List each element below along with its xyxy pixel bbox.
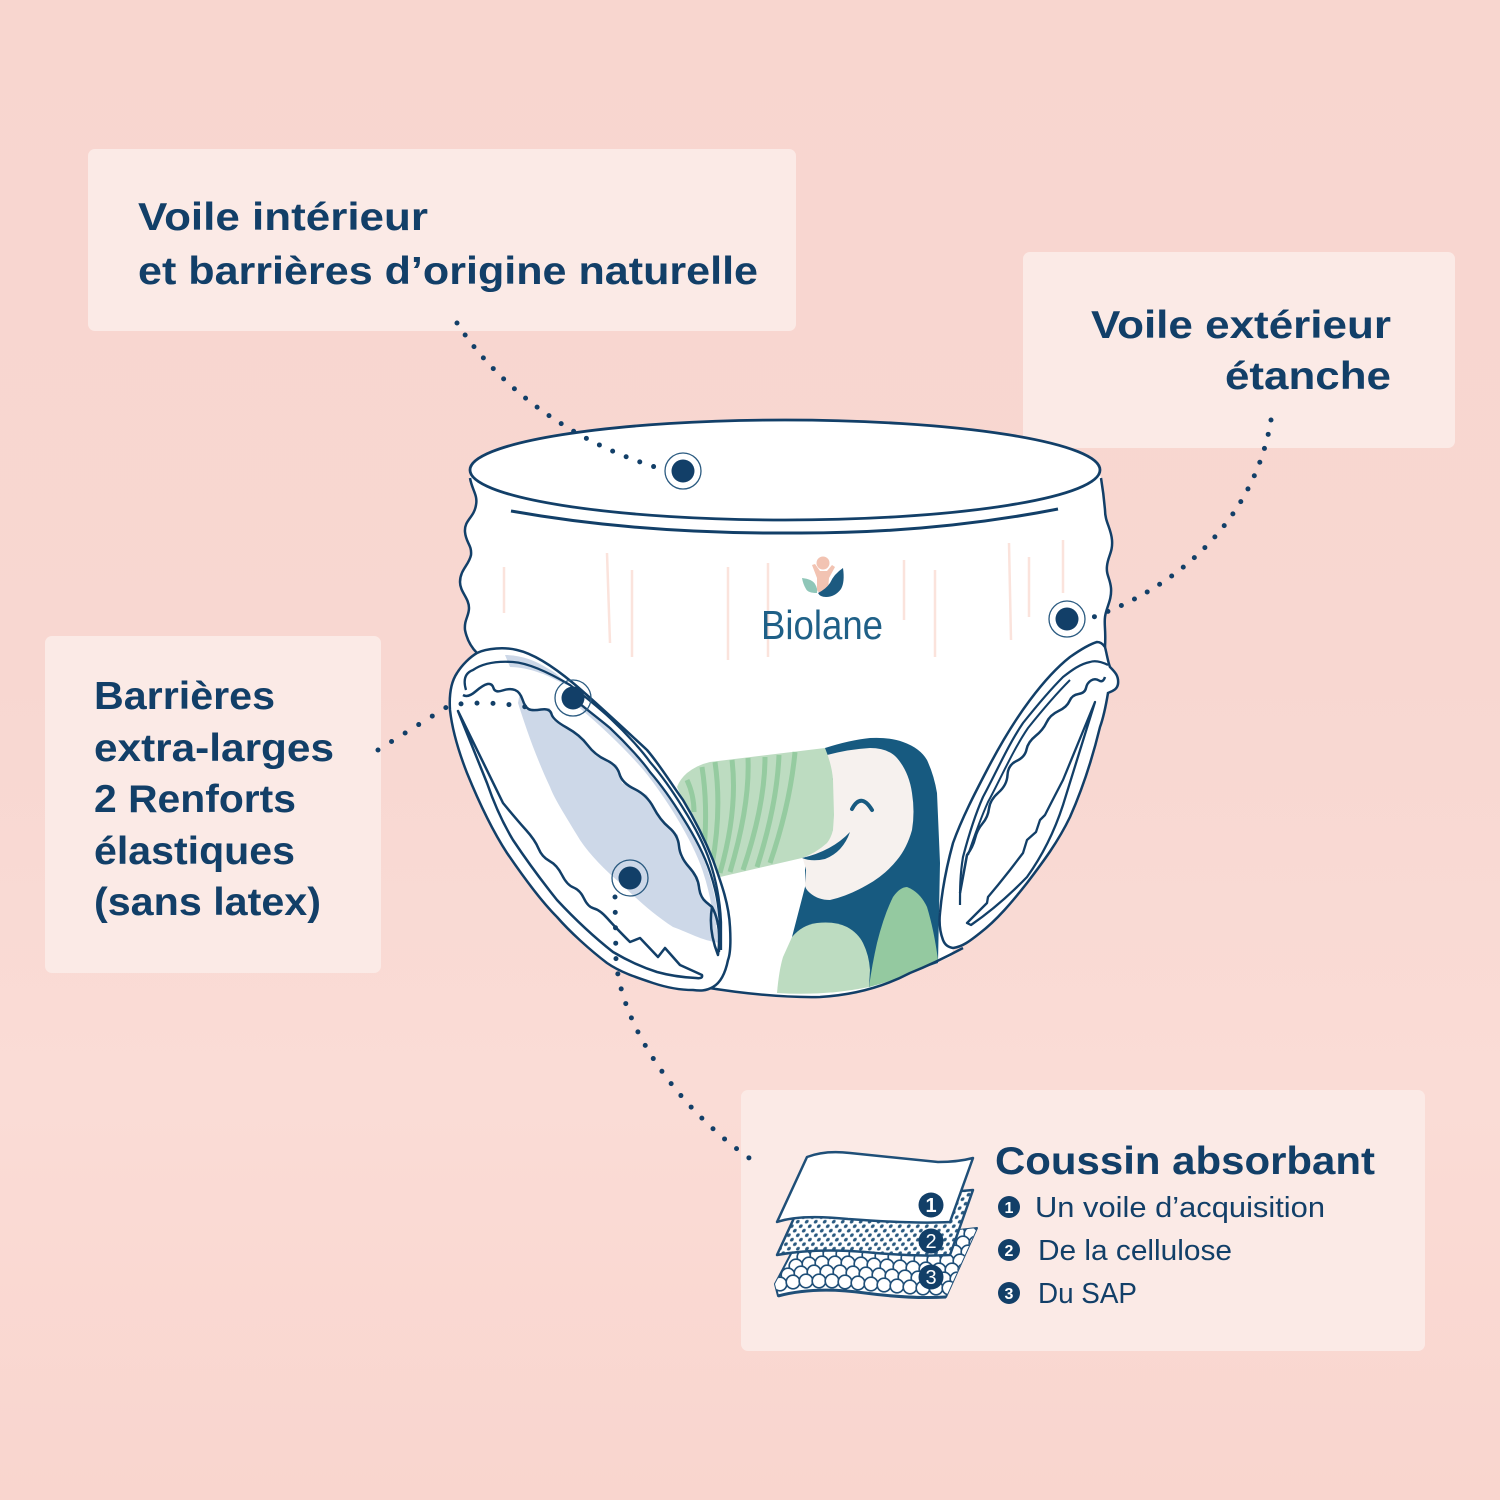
diaper illustration — [450, 420, 1118, 997]
marker: voile intérieur — [665, 453, 701, 489]
text: barrières extra-larges: Barrières — [94, 675, 275, 718]
list item 2: De la cellulose — [1038, 1235, 1232, 1267]
dotted leader: voile extérieur — [1088, 420, 1271, 619]
panel: voile intérieur — [88, 149, 796, 331]
list item 3: Du SAP — [1038, 1278, 1137, 1310]
heading: voile extérieur — [1091, 304, 1391, 398]
badge 3: 3 — [925, 1267, 937, 1289]
text: barrières extra-larges: (sans latex) — [94, 881, 321, 924]
text: barrières extra-larges: extra-larges — [94, 727, 334, 770]
list item 1: Un voile d’acquisition — [1035, 1192, 1325, 1224]
dotted leader: barrières — [378, 703, 532, 750]
left inner lines — [465, 662, 721, 950]
dotted leader: coussin — [615, 897, 752, 1160]
blue barrier — [505, 655, 720, 943]
list item 1: 1 — [1005, 1200, 1014, 1217]
text: barrières extra-larges — [94, 675, 334, 924]
badge 3 — [918, 1264, 944, 1290]
heading: voile extérieur: Voile extérieur — [1091, 304, 1391, 347]
right leg opening — [940, 642, 1118, 948]
biolane logo — [761, 556, 883, 648]
list item 3 — [998, 1278, 1137, 1310]
panel: coussin absorbant — [741, 1090, 1425, 1351]
panel: voile extérieur — [1023, 252, 1455, 448]
badge 1: 1 — [925, 1195, 937, 1217]
text: barrières extra-larges: élastiques — [94, 830, 295, 873]
left upper wave — [463, 684, 719, 955]
text: barrières extra-larges: 2 Renforts — [94, 778, 296, 821]
list item 3: 3 — [1005, 1286, 1014, 1303]
heading: voile intérieur: Voile intérieur — [138, 196, 428, 239]
list item 2: 2 — [1005, 1243, 1014, 1260]
marker: barrières — [555, 680, 591, 716]
left leg opening — [450, 648, 730, 991]
badge 2 — [918, 1228, 944, 1254]
badge 2: 2 — [925, 1231, 937, 1253]
right lower wave — [967, 702, 1095, 925]
dotted leader: voile intérieur — [457, 323, 665, 470]
badge 1 — [918, 1192, 944, 1218]
right upper wave — [960, 677, 1105, 893]
penguin print — [677, 738, 940, 994]
marker: coussin — [612, 860, 648, 896]
bottom outline — [703, 948, 963, 997]
heading: voile intérieur — [138, 196, 758, 293]
heading: voile extérieur: étanche — [1225, 355, 1391, 398]
right inner lines — [960, 661, 1108, 905]
icon: absorbent layers — [773, 1152, 1004, 1298]
biolane logo: Biolane — [761, 602, 883, 648]
heading: voile intérieur: et barrières d’origine naturelle — [138, 250, 758, 293]
diaper body — [460, 420, 1112, 997]
heading: coussin absorbant: Coussin absorbant — [995, 1140, 1375, 1183]
waistband — [470, 420, 1100, 520]
panel: barrières — [45, 636, 381, 973]
pink fold lines — [504, 540, 1063, 660]
marker: voile extérieur — [1049, 601, 1085, 637]
left lower wave — [458, 711, 702, 978]
